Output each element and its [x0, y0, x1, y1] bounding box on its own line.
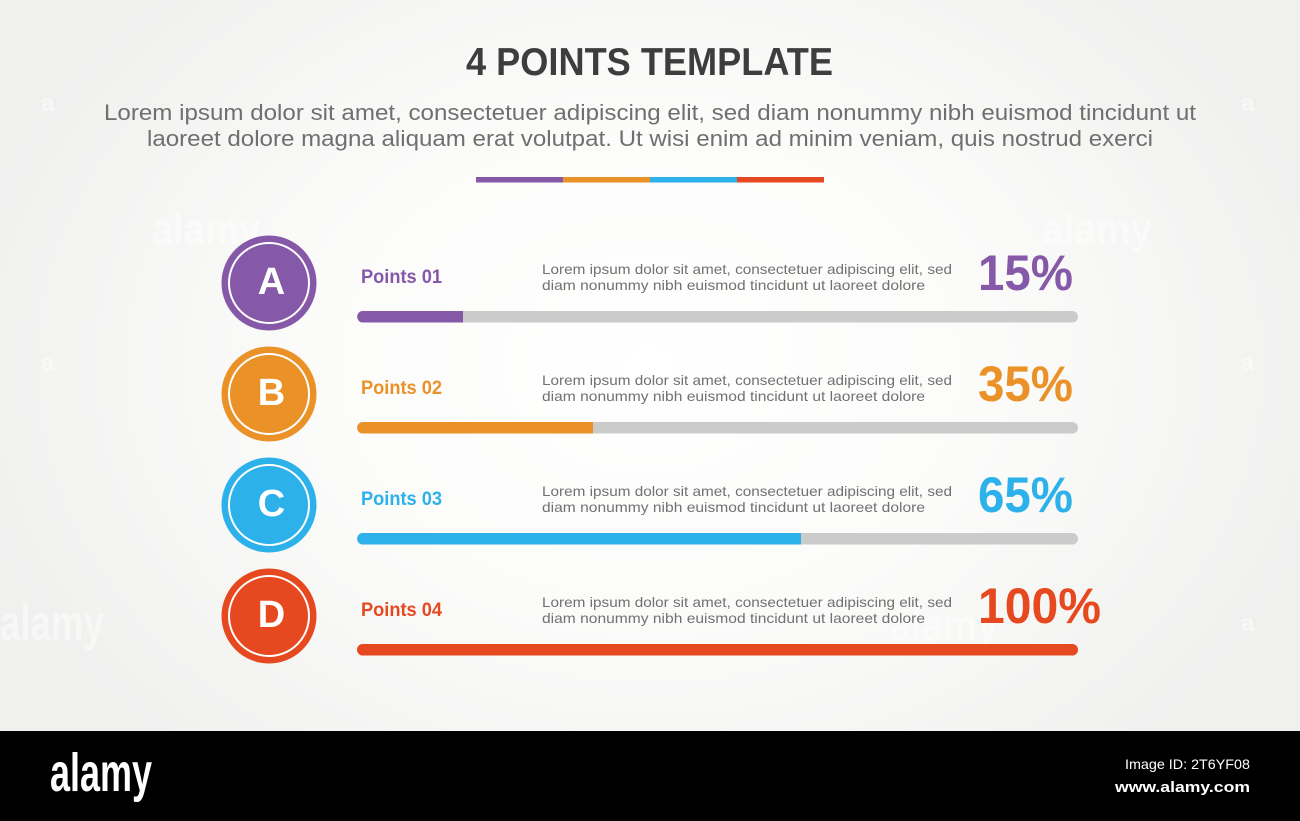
- label: points 03: Points 03: [361, 488, 442, 510]
- watermarks: alamy: [890, 601, 998, 650]
- watermarks: alamy: [0, 595, 104, 651]
- value 15%: 15%: [978, 245, 1073, 301]
- panel: point C: [222, 458, 1078, 552]
- value 100%: 100%: [978, 578, 1101, 634]
- panel: point D: [222, 568, 1101, 664]
- label: points 01: Points 01: [361, 266, 442, 288]
- watermarks: alamy: [152, 205, 260, 254]
- value 65%: 65%: [978, 467, 1073, 523]
- icon: badge D: D: [258, 594, 285, 636]
- icon: badge B: [222, 346, 316, 442]
- description C: Lorem ipsum dolor sit amet, consectetuer adipiscing elit, sed: [542, 483, 952, 499]
- icon: badge A: [222, 236, 316, 330]
- watermarks: a: [41, 350, 55, 377]
- description A: Lorem ipsum dolor sit amet, consectetuer adipiscing elit, sed: [542, 261, 952, 277]
- footer logo: alamy: [50, 743, 152, 803]
- description D: [542, 594, 952, 626]
- icon: badge C: [222, 458, 316, 552]
- icon: badge A: A: [258, 261, 285, 303]
- intro text: laoreet dolore magna aliquam erat volutpat. Ut wisi enim ad minim veniam, quis nostrud exerci: [147, 126, 1153, 151]
- watermarks: a: [1241, 610, 1255, 637]
- colour divider: [476, 177, 824, 182]
- progress bar 15%: [357, 311, 1078, 322]
- description A: [542, 261, 952, 293]
- intro text: Lorem ipsum dolor sit amet, consectetuer adipiscing elit, sed diam nonummy nibh euismod tincidunt ut: [104, 100, 1196, 125]
- watermarks: a: [1241, 90, 1255, 117]
- footer bar: [0, 731, 1300, 821]
- description D: Lorem ipsum dolor sit amet, consectetuer adipiscing elit, sed: [542, 594, 952, 610]
- value 35%: 35%: [978, 356, 1073, 412]
- description B: diam nonummy nibh euismod tincidunt ut laoreet dolore: [542, 388, 925, 404]
- label: points 02: Points 02: [361, 377, 442, 399]
- description C: diam nonummy nibh euismod tincidunt ut laoreet dolore: [542, 499, 925, 515]
- watermarks: a: [1241, 350, 1255, 377]
- website: www.alamy.com: [1114, 779, 1250, 796]
- description C: [542, 483, 952, 515]
- progress bar 35%: [357, 422, 1078, 434]
- description A: diam nonummy nibh euismod tincidunt ut laoreet dolore: [542, 277, 925, 293]
- description D: diam nonummy nibh euismod tincidunt ut laoreet dolore: [542, 610, 925, 626]
- watermarks: a: [41, 90, 55, 117]
- title: 4 POINTS TEMPLATE: [466, 41, 833, 84]
- panel: point B: [222, 346, 1078, 442]
- image id: Image ID: 2T6YF08: [1125, 756, 1250, 772]
- watermarks: [0, 90, 1255, 651]
- icon: badge D: [222, 568, 316, 664]
- description B: [542, 372, 952, 404]
- icon: badge B: B: [258, 372, 285, 414]
- label: points 04: Points 04: [361, 599, 442, 621]
- icon: badge C: C: [258, 483, 285, 525]
- intro text: [104, 100, 1196, 151]
- panel: point A: [222, 236, 1078, 330]
- description B: Lorem ipsum dolor sit amet, consectetuer adipiscing elit, sed: [542, 372, 952, 388]
- progress bar 65%: [357, 533, 1078, 544]
- progress bar 100%: [357, 644, 1078, 656]
- watermarks: alamy: [1042, 205, 1152, 254]
